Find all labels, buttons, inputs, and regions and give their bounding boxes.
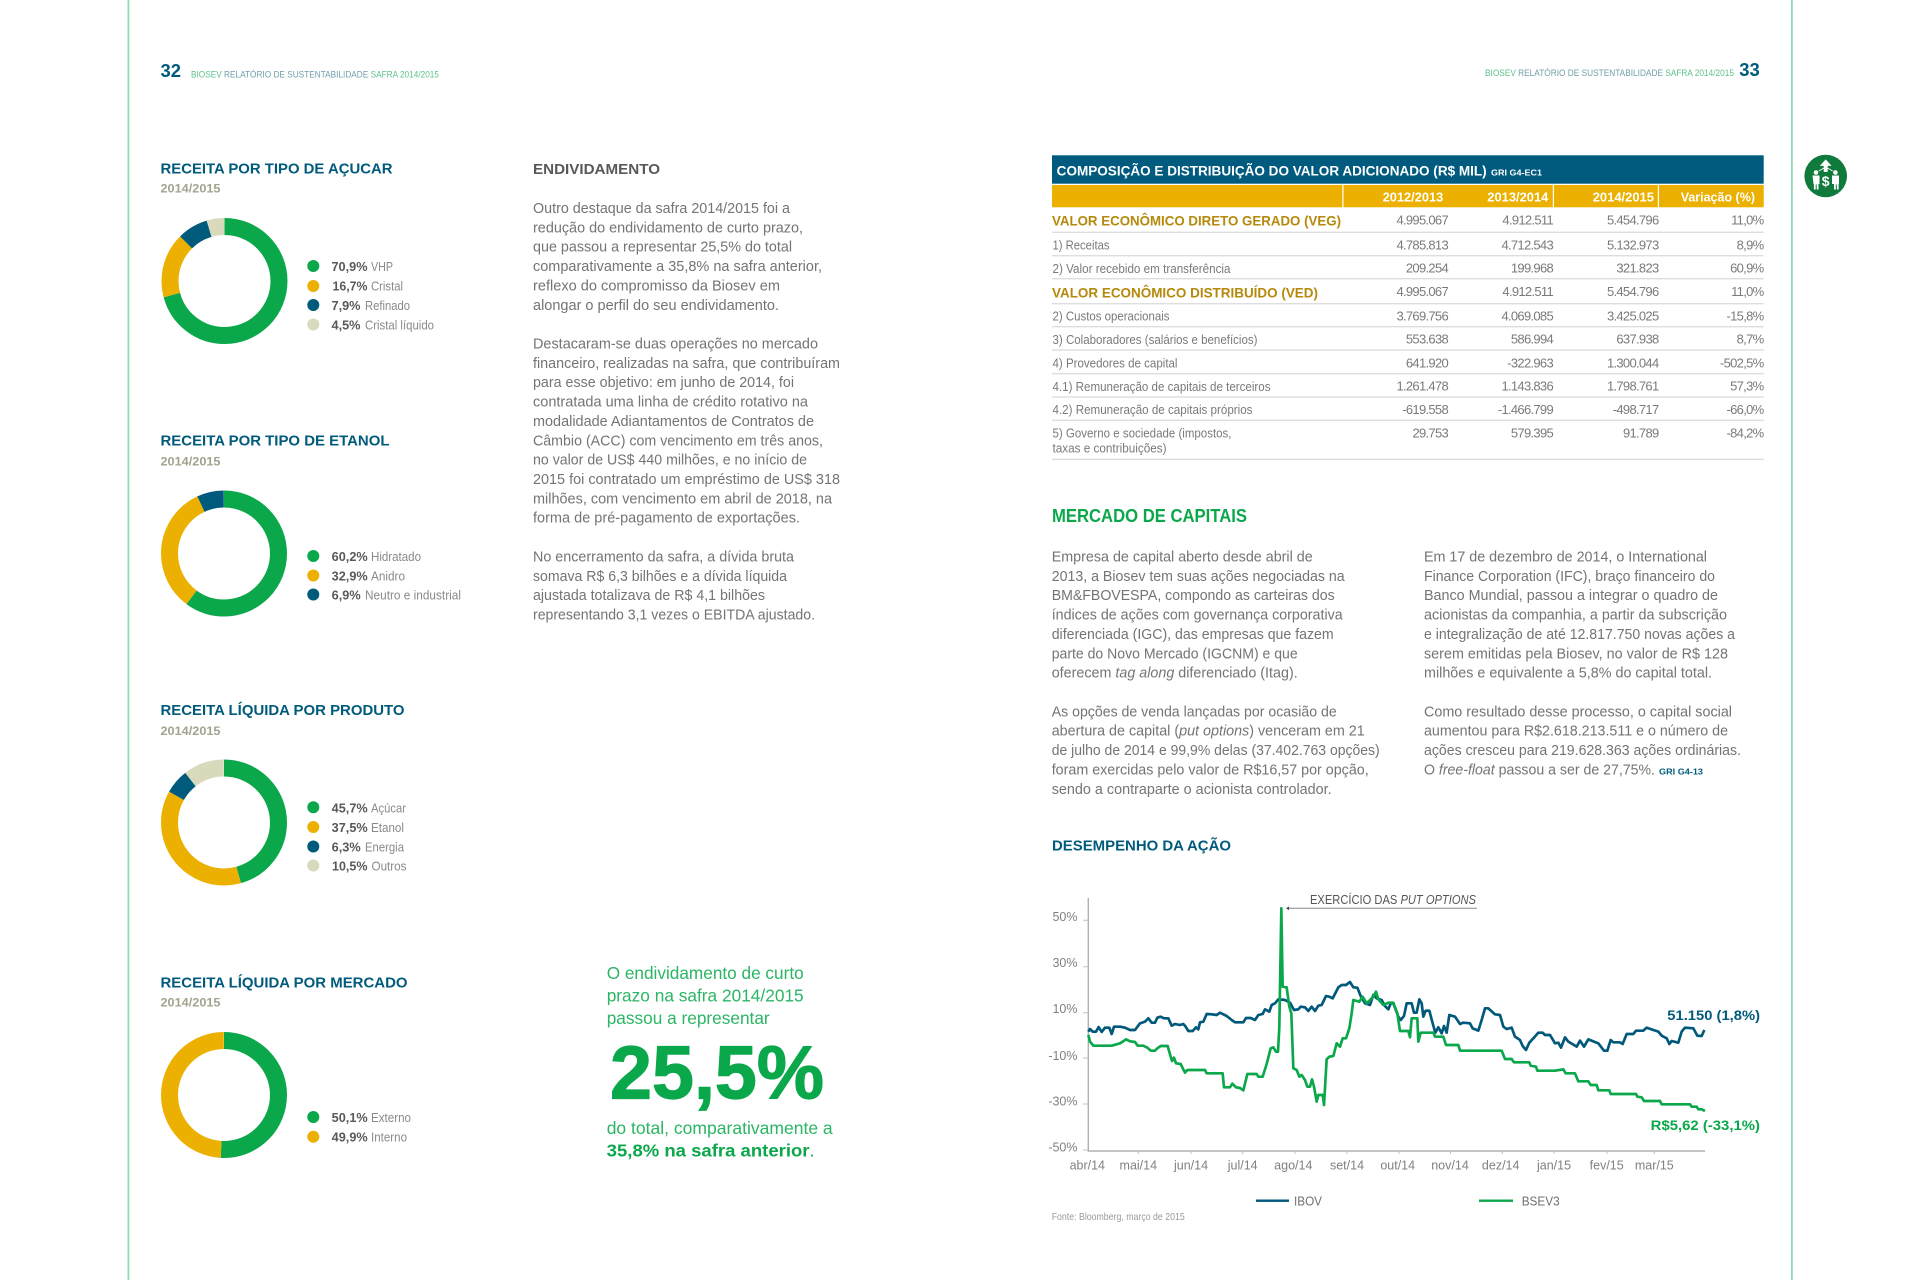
legend: IBOV xyxy=(1256,1195,1323,1209)
callout: 25,5%: O endividamento de curto xyxy=(607,963,804,983)
text column 2: milhões e equivalente a 5,8% do capital total. xyxy=(1424,666,1712,682)
text column 1: sendo a contraparte o acionista controlador. xyxy=(1052,782,1332,798)
series: IBOV xyxy=(1088,982,1704,1051)
table values: 11,0% xyxy=(1731,284,1765,299)
y axis labels: -50% xyxy=(1048,1141,1078,1155)
legend: 60,2% xyxy=(332,550,368,564)
legend: 70,9% xyxy=(332,260,368,274)
heading: RECEITA LÍQUIDA POR PRODUTO xyxy=(160,702,405,719)
table values: 4.912.511 xyxy=(1502,284,1553,299)
text block: financeiro, realizadas na safra, que contribuíram xyxy=(533,356,840,372)
panel: receita por tipo de etanol xyxy=(160,433,461,608)
y axis labels: 10% xyxy=(1052,1002,1078,1016)
legend: VHP xyxy=(371,260,393,274)
legend: 6,9% xyxy=(332,588,361,602)
header: right page xyxy=(1485,60,1760,80)
x axis labels: ago/14 xyxy=(1274,1158,1312,1172)
text column 1: oferecem tag along diferenciado (Itag). xyxy=(1052,666,1298,682)
x axis labels: set/14 xyxy=(1330,1158,1364,1172)
table values: 637.938 xyxy=(1616,332,1659,347)
text block: somava R$ 6,3 bilhões e a dívida líquida xyxy=(533,569,788,585)
panel: receita líquida por produto xyxy=(160,702,406,877)
callout: 25,5%: 25,5% xyxy=(610,1030,824,1114)
line chart xyxy=(1048,892,1760,1172)
legend: Neutro e industrial xyxy=(365,588,461,602)
source note: Fonte: Bloomberg, março de 2015 xyxy=(1052,1211,1185,1223)
heading: RECEITA POR TIPO DE ETANOL xyxy=(160,433,390,450)
text column 2: e integralização de até 12.817.750 novas ações a xyxy=(1424,627,1736,643)
y axis labels: -30% xyxy=(1048,1095,1078,1109)
legend: 16,7% xyxy=(332,280,368,294)
callout: 25,5%: passou a representar xyxy=(607,1008,770,1028)
table values: 11,0% xyxy=(1731,212,1765,227)
heading: RECEITA LÍQUIDA POR MERCADO xyxy=(160,974,408,991)
icon: people and money: $ xyxy=(1822,173,1830,189)
text column 2 xyxy=(1424,550,1741,778)
callout: 25,5% xyxy=(607,963,833,1161)
table values: -66,0% xyxy=(1726,402,1765,417)
legend xyxy=(307,550,461,602)
text block: contratada uma linha de crédito rotativo na xyxy=(533,395,809,411)
text column 2: Banco Mundial, passou a integrar o quadro de xyxy=(1424,588,1718,604)
table values: -84,2% xyxy=(1726,425,1765,440)
table values: 209.254 xyxy=(1406,261,1448,276)
table values: 4.069.085 xyxy=(1501,308,1553,323)
text block: milhões, com vencimento em abril de 2018, na xyxy=(533,491,833,507)
table values: 8,7% xyxy=(1737,332,1765,347)
table values: -619.558 xyxy=(1402,402,1448,417)
table header: 2014/2015 xyxy=(1593,190,1654,205)
legend: IBOV: IBOV xyxy=(1294,1195,1323,1209)
table values: 57,3% xyxy=(1730,379,1765,394)
text column 1: As opções de venda lançadas por ocasião de xyxy=(1052,704,1337,720)
header: left page: BIOSEV RELATÓRIO DE SUSTENTABILIDADE SAFRA 2014/2015 xyxy=(191,69,439,80)
legend: 4,5% xyxy=(332,318,360,332)
text column 2: aumentou para R$2.618.213.511 e o número de xyxy=(1424,724,1728,740)
table values: 1.798.761 xyxy=(1607,379,1659,394)
annotation: exercício das put options: EXERCÍCIO DAS PUT OPTIONS xyxy=(1310,892,1477,907)
table values: 4.712.543 xyxy=(1501,237,1553,252)
panel: receita líquida por mercado xyxy=(160,974,411,1150)
callout: 25,5%: 35,8% na safra anterior . xyxy=(607,1141,815,1161)
x axis labels: fev/15 xyxy=(1590,1158,1624,1172)
annotation: exercício das put options xyxy=(1286,892,1477,910)
legend xyxy=(307,1111,411,1145)
text column 1 xyxy=(1052,550,1380,798)
x axis labels: jul/14 xyxy=(1227,1158,1258,1172)
table values: -1.466.799 xyxy=(1498,402,1553,417)
table values: 4.785.813 xyxy=(1396,237,1448,252)
table values: 3.769.756 xyxy=(1396,308,1448,323)
row labels: 4.2) Remuneração de capitais próprios xyxy=(1052,403,1252,417)
x axis labels: nov/14 xyxy=(1431,1158,1469,1172)
legend: Energia xyxy=(365,840,404,854)
table values: 199.968 xyxy=(1511,261,1553,276)
text block: Destacaram-se duas operações no mercado xyxy=(533,336,818,352)
legend: Etanol xyxy=(371,821,404,835)
table values: -15,8% xyxy=(1726,308,1765,323)
legend: BSEV3 xyxy=(1479,1195,1560,1209)
row labels: 2) Valor recebido em transferência xyxy=(1052,262,1231,276)
legend: 50,1% xyxy=(332,1111,368,1125)
row labels: 1) Receitas xyxy=(1052,238,1110,252)
x axis labels: dez/14 xyxy=(1482,1158,1520,1172)
text column 1: 2013, a Biosev tem suas ações negociadas na xyxy=(1052,569,1346,585)
text column 2: O free-float passou a ser de 27,75%. xyxy=(1424,762,1655,778)
text column 1: BM&FBOVESPA, compondo as carteiras dos xyxy=(1052,588,1335,604)
legend: 6,3% xyxy=(332,840,361,854)
table header: Variação (%) xyxy=(1681,190,1755,205)
table values: 321.823 xyxy=(1616,261,1659,276)
subheading: 2014/2015 xyxy=(160,996,221,1010)
table values: -502,5% xyxy=(1720,355,1765,370)
legend: Externo xyxy=(371,1111,411,1125)
heading: MERCADO DE CAPITAIS xyxy=(1052,506,1247,526)
row labels: 4.1) Remuneração de capitais de terceiros xyxy=(1052,380,1270,394)
donut chart xyxy=(170,226,279,336)
legend xyxy=(307,801,406,874)
legend: 7,9% xyxy=(332,299,360,313)
legend: Outros xyxy=(372,860,406,874)
text block: modalidade Adiantamentos de Contratos de xyxy=(533,414,814,430)
text column 2: ações cresceu para 219.628.363 ações ordinárias. xyxy=(1424,743,1741,759)
text block: que passou a representar 25,5% do total xyxy=(533,240,792,256)
legend xyxy=(307,260,434,332)
table values: -498.717 xyxy=(1613,402,1659,417)
table values: 4.995.067 xyxy=(1396,284,1448,299)
table header: 2013/2014 xyxy=(1487,190,1549,205)
row labels: 2) Custos operacionais xyxy=(1052,310,1170,324)
header: left page: 32 xyxy=(160,61,181,81)
row labels: 5) Governo e sociedade (impostos, xyxy=(1052,426,1232,440)
icon: people and money xyxy=(1804,155,1847,197)
x axis labels: out/14 xyxy=(1380,1158,1415,1172)
legend: Refinado xyxy=(365,299,410,313)
text column 1: diferenciada (IGC), das empresas que fazem xyxy=(1052,627,1334,643)
legend: Hidratado xyxy=(371,550,421,564)
table values: 5.454.796 xyxy=(1607,284,1659,299)
end label: BSEV3: R$5,62 (-33,1%) xyxy=(1651,1118,1760,1133)
header: right page: BIOSEV RELATÓRIO DE SUSTENTABILIDADE SAFRA 2014/2015 xyxy=(1485,68,1734,79)
row labels: VALOR ECONÔMICO DIRETO GERADO (VEG) xyxy=(1052,212,1341,229)
table title bar: COMPOSIÇÃO E DISTRIBUIÇÃO DO VALOR ADICIONADO (R$ MIL) xyxy=(1057,163,1487,178)
row labels: 4) Provedores de capital xyxy=(1052,356,1178,370)
text block: reflexo do compromisso da Biosev em xyxy=(533,278,780,294)
legend: BSEV3: BSEV3 xyxy=(1522,1195,1560,1209)
table values: 1.143.836 xyxy=(1501,379,1553,394)
table values: 5.454.796 xyxy=(1607,212,1659,227)
x axis labels: mai/14 xyxy=(1120,1158,1157,1172)
table values: 4.912.511 xyxy=(1502,212,1553,227)
legend: 37,5% xyxy=(332,821,368,835)
text column 2: acionistas da companhia, a partir da subscrição xyxy=(1424,608,1727,624)
text column 1: índices de ações com governança corporativa xyxy=(1052,608,1344,624)
text block: Câmbio (ACC) com vencimento em três anos, xyxy=(533,433,823,449)
panel: endividamento xyxy=(533,161,840,624)
table values: 4.995.067 xyxy=(1396,212,1448,227)
text column 2: Em 17 de dezembro de 2014, o International xyxy=(1424,550,1707,566)
table values: 579.395 xyxy=(1511,425,1553,440)
text block: no valor de US$ 440 milhões, e no início de xyxy=(533,453,807,469)
legend: Interno xyxy=(371,1131,407,1145)
axes xyxy=(1083,898,1705,1154)
heading: DESEMPENHO DA AÇÃO xyxy=(1052,837,1231,855)
table title bar: GRI G4-EC1 xyxy=(1491,167,1542,177)
table header xyxy=(1052,185,1764,207)
text block: No encerramento da safra, a dívida bruta xyxy=(533,550,795,566)
legend: Cristal líquido xyxy=(365,318,434,332)
table values: 1.261.478 xyxy=(1396,379,1448,394)
panel: receita por tipo de açúcar xyxy=(160,160,434,336)
table values: 641.920 xyxy=(1406,355,1448,370)
table values: 3.425.025 xyxy=(1607,308,1659,323)
callout: 25,5%: prazo na safra 2014/2015 xyxy=(607,986,804,1006)
y axis labels: 50% xyxy=(1052,910,1078,924)
legend: Cristal xyxy=(371,280,403,294)
legend: Anidro xyxy=(371,570,405,584)
text column 2: GRI G4-13 xyxy=(1659,766,1703,776)
x axis labels xyxy=(1070,1158,1674,1172)
text column 2: serem emitidas pela Biosev, no valor de R$ 128 xyxy=(1424,646,1728,662)
row labels xyxy=(1052,212,1341,456)
text column 2: Como resultado desse processo, o capital social xyxy=(1424,704,1732,720)
table values: 1.300.044 xyxy=(1607,355,1659,370)
table values: 29.753 xyxy=(1412,425,1448,440)
subheading: 2014/2015 xyxy=(160,182,221,196)
subheading: 2014/2015 xyxy=(160,724,221,738)
text column 1: foram exercidas pelo valor de R$16,57 por opção, xyxy=(1052,762,1369,778)
legend: 49,9% xyxy=(332,1131,368,1145)
table rules xyxy=(1052,232,1764,460)
donut chart xyxy=(170,768,278,877)
row labels: VALOR ECONÔMICO DISTRIBUÍDO (VED) xyxy=(1052,283,1318,300)
text block: forma de pré-pagamento de exportações. xyxy=(533,511,800,527)
legend: 10,5% xyxy=(332,860,368,874)
donut chart xyxy=(170,499,278,608)
y axis labels xyxy=(1048,910,1078,1155)
header: left page xyxy=(160,61,439,81)
donut chart xyxy=(170,1040,278,1150)
table values: 553.638 xyxy=(1406,332,1448,347)
table values: 8,9% xyxy=(1737,237,1765,252)
panel: mercado de capitais xyxy=(1052,506,1741,798)
y axis labels: 30% xyxy=(1052,956,1078,970)
text block: representando 3,1 vezes o EBITDA ajustado. xyxy=(533,608,815,624)
callout: 25,5%: do total, comparativamente a xyxy=(607,1118,833,1138)
series: BSEV3 xyxy=(1088,908,1705,1111)
text block xyxy=(533,201,840,624)
table values: 91.789 xyxy=(1623,425,1659,440)
legend: 45,7% xyxy=(332,802,368,816)
x axis labels: jan/15 xyxy=(1536,1158,1571,1172)
text block: comparativamente a 35,8% na safra anterior, xyxy=(533,259,822,275)
text block: para esse objetivo: em junho de 2014, foi xyxy=(533,375,794,391)
text block: redução do endividamento de curto prazo, xyxy=(533,220,803,236)
table title bar xyxy=(1052,155,1764,184)
row labels: 3) Colaboradores (salários e benefícios) xyxy=(1052,333,1258,347)
table values xyxy=(1396,212,1765,440)
x axis labels: mar/15 xyxy=(1635,1158,1674,1172)
text column 1: de julho de 2014 e 99,9% delas (37.402.763 opções) xyxy=(1052,743,1380,759)
table values: 5.132.973 xyxy=(1607,237,1659,252)
subheading: 2014/2015 xyxy=(160,455,221,469)
heading: RECEITA POR TIPO DE AÇUCAR xyxy=(160,160,393,177)
text column 1: Empresa de capital aberto desde abril de xyxy=(1052,550,1313,566)
end label: IBOV: 51.150 (1,8%) xyxy=(1667,1008,1760,1023)
row labels: taxas e contribuições) xyxy=(1052,442,1166,456)
text block: alongar o perfil do seu endividamento. xyxy=(533,298,779,314)
y axis labels: -10% xyxy=(1048,1049,1078,1063)
heading: ENDIVIDAMENTO xyxy=(533,161,660,178)
table values: 60,9% xyxy=(1730,261,1765,276)
text block: Outro destaque da safra 2014/2015 foi a xyxy=(533,201,791,217)
text column 1: parte do Novo Mercado (IGCNM) e que xyxy=(1052,646,1298,662)
legend: Açúcar xyxy=(371,802,406,816)
table values: 586.994 xyxy=(1511,332,1553,347)
table header: 2012/2013 xyxy=(1383,190,1443,205)
header: right page: 33 xyxy=(1739,60,1760,80)
text column 2: Finance Corporation (IFC), braço financeiro do xyxy=(1424,569,1715,585)
text column 1: abertura de capital (put options) venceram em 21 xyxy=(1052,724,1365,740)
x axis labels: jun/14 xyxy=(1173,1158,1208,1172)
panel: desempenho da ação xyxy=(1048,837,1760,1223)
legend: 32,9% xyxy=(332,570,368,584)
text block: ajustada totalizava de R$ 4,1 bilhões xyxy=(533,588,765,604)
x axis labels: abr/14 xyxy=(1070,1158,1105,1172)
text block: 2015 foi contratado um empréstimo de US$ 318 xyxy=(533,472,840,488)
table values: -322.963 xyxy=(1507,355,1553,370)
table: composição e distribuição do valor adicionado xyxy=(1052,155,1765,460)
